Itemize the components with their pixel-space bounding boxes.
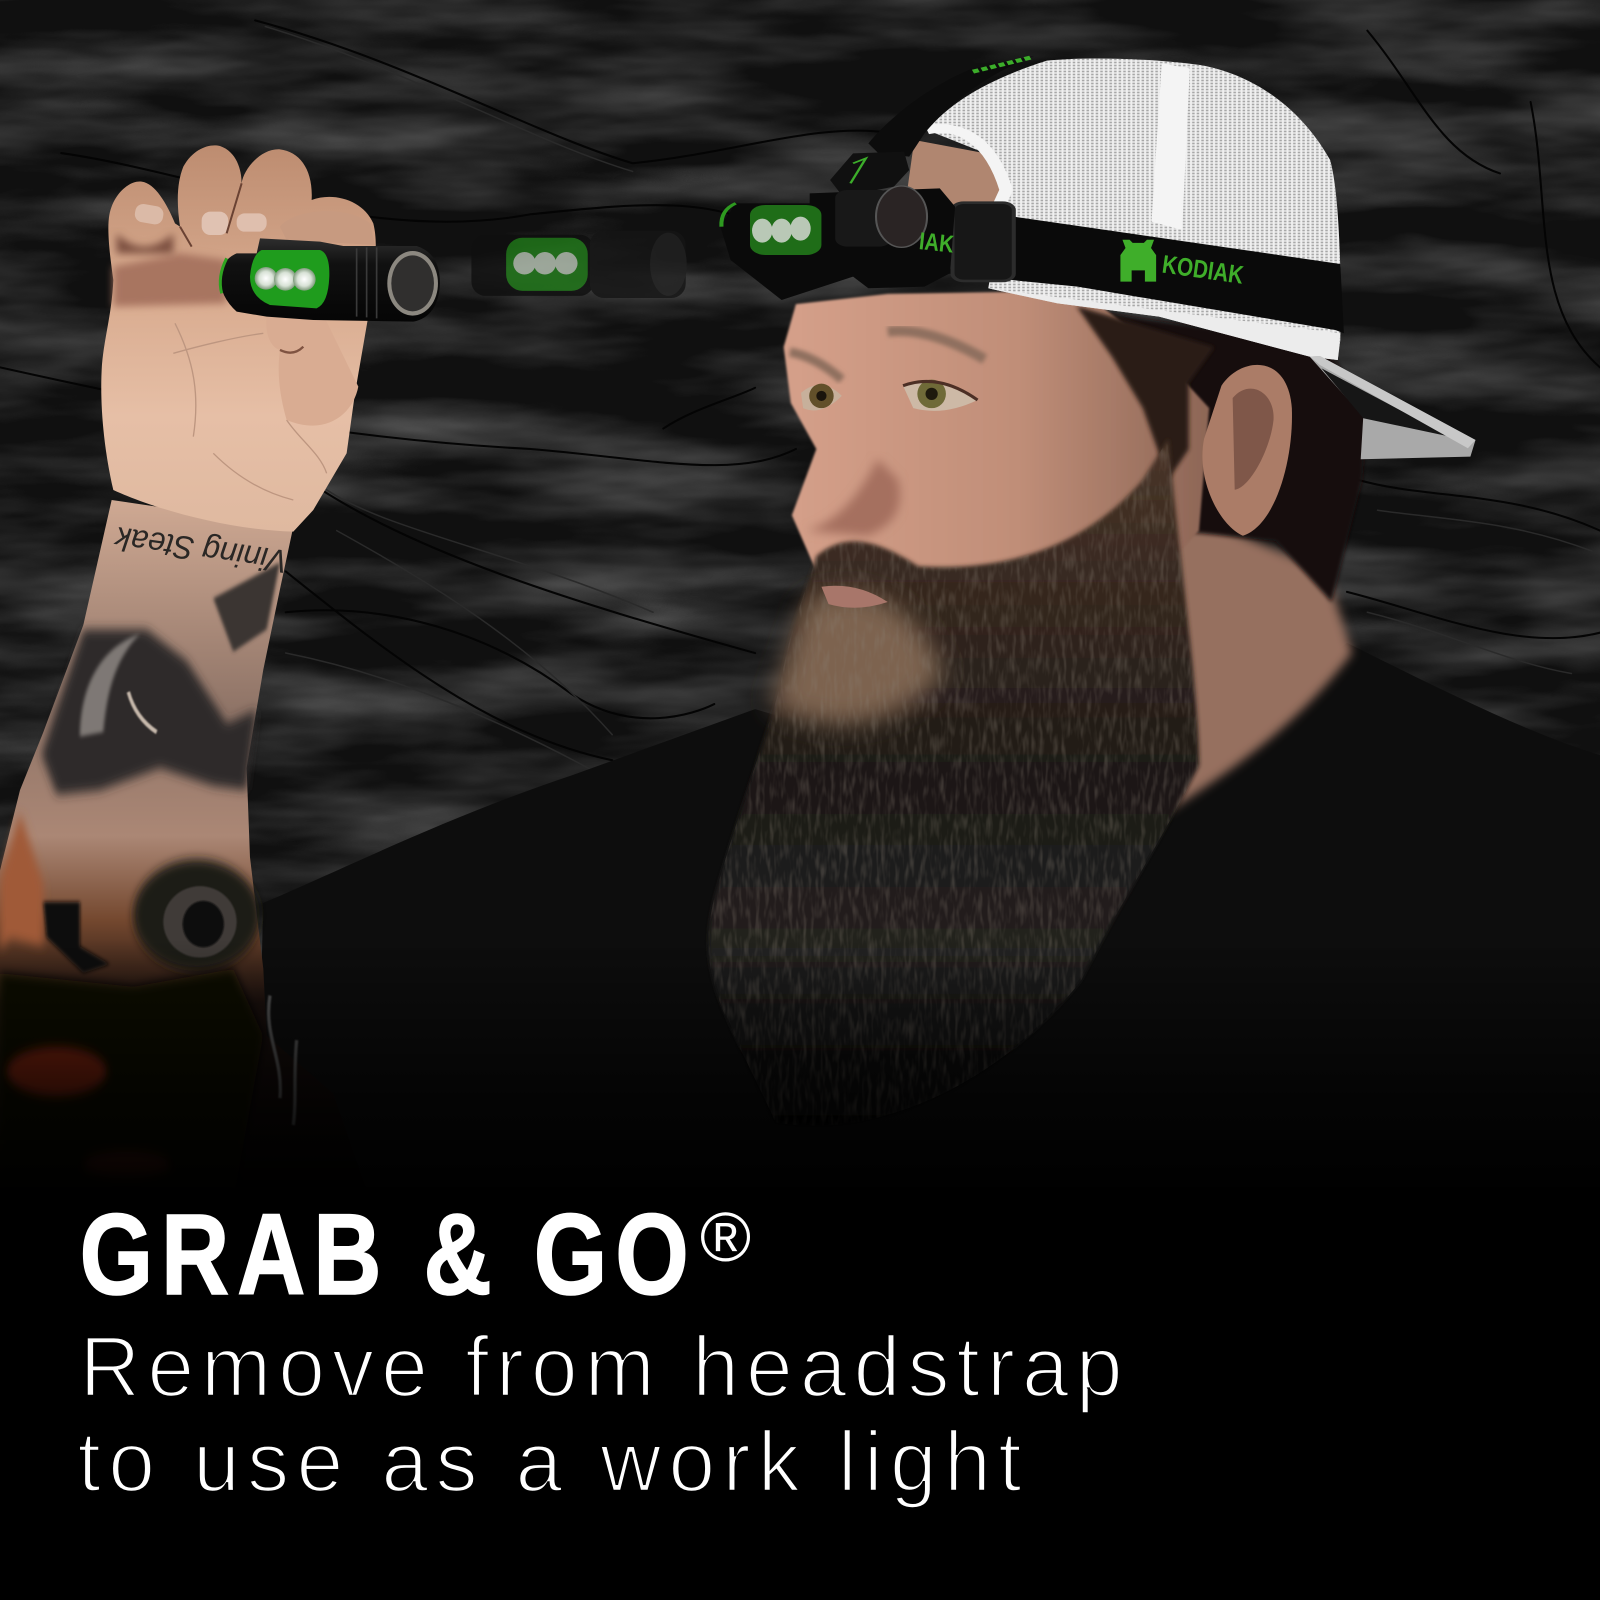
hand and flashlight, drawn in zoom-crop space bbox=[101, 145, 440, 532]
green plate bbox=[750, 205, 821, 255]
black spots bbox=[43, 902, 110, 973]
wrist tattoo shadow bbox=[213, 562, 280, 652]
moustache and chin highlight bbox=[770, 592, 944, 724]
black t-shirt bbox=[255, 643, 1600, 1224]
cap and headlamp, drawn in zoom-crop space bbox=[720, 56, 1476, 459]
finger gaps bbox=[180, 183, 242, 247]
finger shading bbox=[113, 253, 227, 307]
buckle bbox=[953, 203, 1014, 281]
man: body, head, cap bbox=[255, 56, 1600, 1224]
bear logo bbox=[1120, 240, 1156, 282]
beard bbox=[708, 439, 1199, 1126]
hand bbox=[101, 145, 376, 532]
body line 1: Remove from headstrap bbox=[80, 1318, 1123, 1414]
lower cap band bbox=[988, 288, 1340, 360]
LEDs bbox=[255, 267, 277, 290]
eyes bbox=[801, 380, 978, 411]
back of hair bbox=[1061, 306, 1367, 602]
strap fragment behind lamp: IAK bbox=[918, 228, 955, 259]
eye ring bbox=[133, 859, 260, 971]
barrel ribs bbox=[357, 247, 377, 318]
headlamp body bbox=[720, 188, 955, 300]
green rim bbox=[220, 258, 227, 293]
green plate bbox=[250, 250, 329, 308]
ghost flashlight mid-motion bbox=[471, 231, 687, 298]
strap label: KODIAK bbox=[1160, 251, 1246, 290]
mesh crown bbox=[927, 59, 1341, 360]
flashlight barrel bbox=[220, 238, 440, 322]
registered mark: ® bbox=[700, 1198, 751, 1276]
caption block bbox=[78, 1191, 1123, 1509]
ear bbox=[1202, 365, 1292, 536]
palm creases bbox=[173, 323, 327, 500]
heading: GRAB & GO bbox=[80, 1191, 689, 1319]
feather highlights bbox=[80, 634, 140, 737]
wrist lettering tattoo: Vining Steak bbox=[111, 520, 290, 581]
lower dark sleeve bbox=[0, 969, 263, 1200]
brim bbox=[1310, 356, 1476, 459]
feather shadow bbox=[42, 629, 257, 795]
lips bbox=[821, 586, 888, 608]
nose shadow bbox=[806, 459, 900, 536]
white cap seam bbox=[1152, 63, 1190, 230]
body line 2: to use as a work light bbox=[78, 1413, 1022, 1509]
neck bbox=[1112, 490, 1352, 827]
face bbox=[784, 291, 1209, 612]
dark fade over lower image bbox=[0, 939, 1600, 1199]
beard hair texture bbox=[708, 439, 1199, 1126]
thumb bbox=[266, 315, 358, 426]
tattooed forearm bbox=[0, 500, 370, 1200]
temple hair bbox=[1077, 306, 1214, 480]
strap over cap bbox=[945, 217, 1344, 333]
end cap bbox=[387, 251, 438, 316]
nails bbox=[134, 203, 165, 226]
orange patch bbox=[0, 812, 43, 951]
black footer panel bbox=[0, 1196, 1600, 1600]
upper strap bbox=[868, 56, 1034, 157]
brows bbox=[790, 331, 985, 380]
lens bbox=[835, 190, 891, 247]
bracket bbox=[830, 152, 909, 197]
forehead under cap bbox=[904, 140, 1011, 227]
white forehead band bbox=[927, 129, 1006, 207]
